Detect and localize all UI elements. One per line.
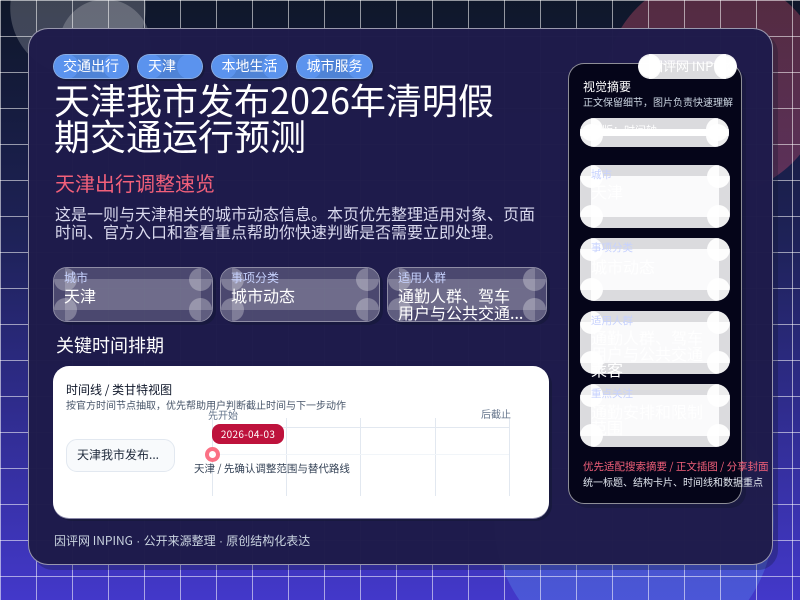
timeline title: 时间线 / 类甘特视图	[66, 381, 172, 398]
side card: 城市: 城市	[591, 167, 612, 182]
side card: 事项分类: 事项分类	[591, 240, 633, 255]
side card: template	[580, 118, 729, 147]
card value: 用户与公共交通	[591, 341, 703, 365]
footer source: 因评网 INPING · 公开来源整理 · 原创结构化表达	[54, 532, 310, 549]
subtitle: 天津出行调整速览	[55, 168, 215, 197]
tag: 天津	[137, 54, 203, 79]
tag: 交通出行: 交通出行	[63, 56, 119, 76]
info card: 城市: 天津	[64, 283, 96, 307]
side card: 重点关注: 范围	[591, 415, 623, 439]
decorative circle: bottom blue	[494, 380, 774, 600]
tag: 城市服务	[296, 54, 373, 79]
brand pill	[638, 54, 737, 79]
side card: 适用人群	[580, 311, 730, 381]
timeline description: 按官方时间节点抽取，优先帮助用户判断截止时间与下一步动作	[66, 397, 346, 412]
side card: 重点关注: 通勤安排和限制	[591, 399, 703, 423]
side panel description: 正文保留细节，图片负责快速理解	[583, 94, 733, 109]
info card: 适用人群: 通勤人群、驾车	[398, 283, 510, 307]
side card: 重点关注: 重点关注	[591, 386, 633, 401]
side card: template: 模版：时间轴	[591, 122, 657, 138]
side card: 城市	[580, 165, 730, 228]
info card: 事项分类: 事项分类	[231, 269, 279, 286]
axis label: end: 后截止	[481, 406, 511, 421]
tag: 天津: 天津	[148, 56, 176, 76]
row label pill: 天津我市发布...	[77, 446, 159, 463]
date badge: 2026-04-03	[221, 426, 275, 441]
side card: 重点关注	[580, 384, 730, 447]
title: 期交通运行预测	[54, 109, 306, 161]
tag: 本地生活: 本地生活	[222, 56, 278, 76]
intro paragraph: 这是一则与天津相关的城市动态信息。本页优先整理适用对象、页面	[55, 201, 535, 225]
timeline card	[53, 366, 549, 518]
card value: 通勤人群、驾车	[591, 325, 703, 349]
date badge	[212, 424, 284, 444]
decorative circle: top right pink	[605, 0, 800, 195]
card background	[580, 311, 730, 374]
side panel note: 统一标题、结构卡片、时间线和数据重点	[583, 474, 763, 489]
card value	[591, 325, 703, 381]
decorative circle: top left inner	[59, 0, 151, 91]
tag: 交通出行	[53, 54, 129, 79]
milestone marker	[205, 447, 220, 462]
brand pill: 因评网 INPING	[650, 56, 736, 75]
side panel heading: 视觉摘要	[583, 78, 631, 95]
tag: 城市服务: 城市服务	[306, 56, 362, 76]
title: 天津我市发布2026年清明假	[54, 73, 494, 125]
side card: 事项分类	[580, 238, 730, 301]
row label pill	[66, 439, 175, 472]
card value: 乘客	[591, 357, 623, 381]
intro paragraph: 时间、官方入口和查看重点帮助你快速判断是否需要立即处理。	[55, 219, 503, 243]
decorative circle: top left outer	[10, 0, 146, 76]
info card: 城市	[53, 267, 213, 322]
tag: 本地生活	[211, 54, 288, 79]
section heading: 关键时间排期	[56, 332, 164, 358]
info card: 城市: 城市	[64, 269, 88, 286]
axis label: start: 先开始	[208, 407, 238, 422]
milestone label: 天津 / 先确认调整范围与替代路线	[194, 461, 350, 476]
title	[54, 73, 494, 161]
info card: 适用人群	[387, 267, 547, 322]
intro paragraph	[55, 201, 535, 243]
info card: 适用人群: 适用人群	[398, 269, 446, 286]
side panel: visual summary	[568, 63, 742, 504]
info card: 事项分类	[220, 267, 380, 322]
side panel note accent: 优先适配搜索摘要 / 正文插图 / 分享封面	[583, 459, 769, 474]
side card: 城市: 天津	[591, 179, 623, 203]
side card: 事项分类: 城市动态	[591, 254, 655, 278]
card label: 适用人群	[591, 313, 633, 328]
info card: 事项分类: 城市动态	[231, 283, 295, 307]
gantt grid lines	[212, 418, 510, 496]
